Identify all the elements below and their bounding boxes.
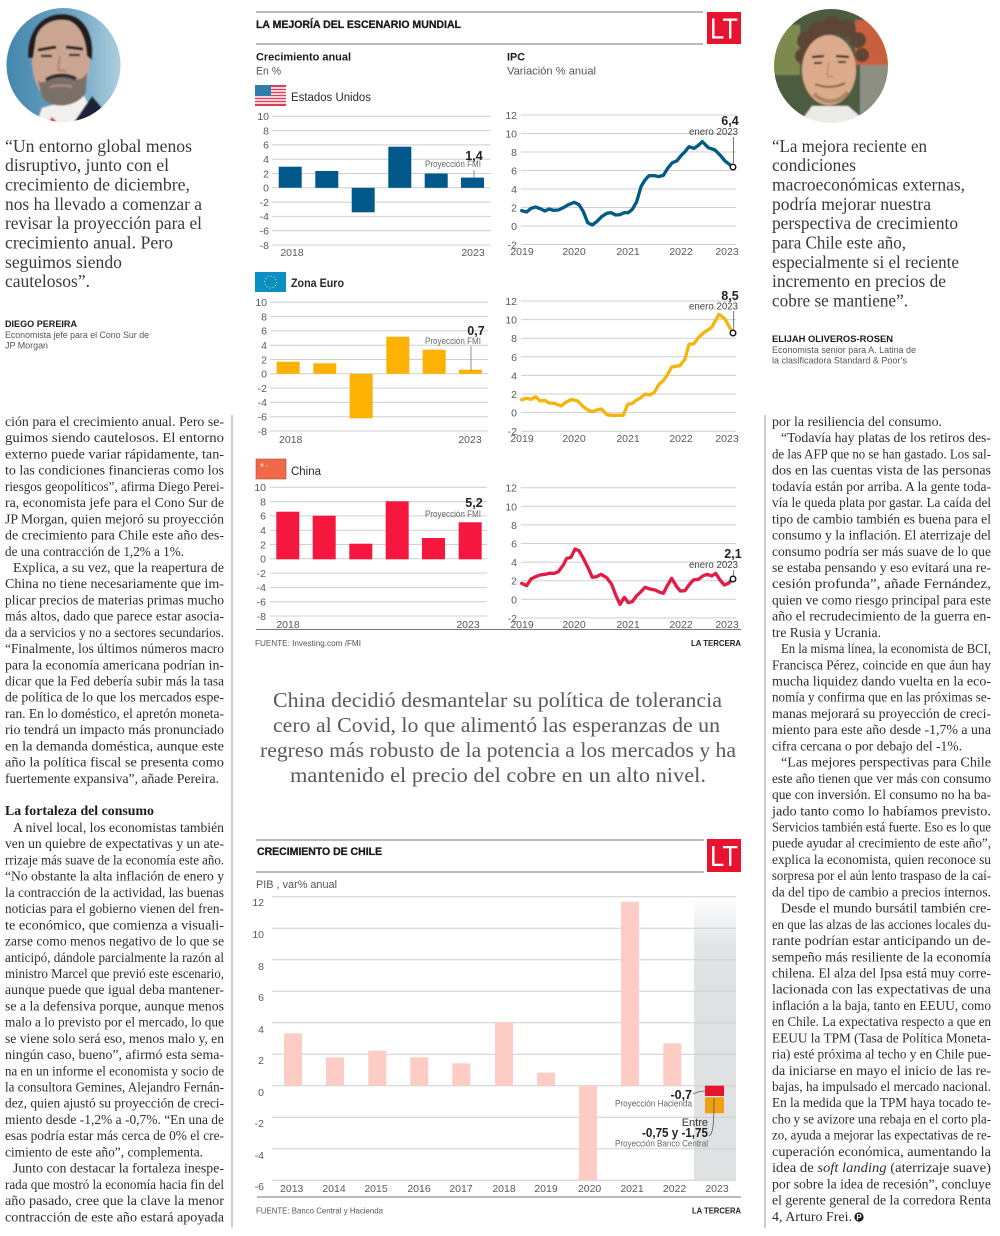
article text: right column: cesión profunda”, añade Fernández, <box>772 576 991 591</box>
article text: left column: en la demanda doméstica, aunque este <box>5 738 224 753</box>
line chart: IPC Zona Euro: -2 <box>508 426 517 438</box>
bar chart: crecimiento China: -8 <box>257 611 266 623</box>
bar chart: PIB Chile: 2019 <box>534 1183 558 1195</box>
article text: left column: ningún caso, bueno”, afirmó esta sema- <box>5 1047 224 1062</box>
article text: left column: fuertemente expansiva”, añade Pereira. <box>5 771 219 786</box>
article text: left column: dicar que la Fed debería subir más la tasa <box>5 674 224 688</box>
article text: left column: noticias para el gobierno vienen del fren- <box>5 901 224 916</box>
article text: right column: bajas, ha impulsado el mercado nacional. <box>772 1079 991 1094</box>
bar chart: crecimiento Estados Unidos: 0 <box>263 183 269 195</box>
article text: left column: se viene solo será eso, menos malo y, en <box>5 1031 224 1046</box>
line chart: IPC Estados Unidos: 10 <box>505 128 517 140</box>
line chart: IPC China: 6 <box>511 538 517 550</box>
quote: Elijah Oliveros-Rosen: “La mejora reciente en <box>772 136 927 156</box>
line chart: IPC Zona Euro: 0 <box>511 408 517 420</box>
bar chart: crecimiento Estados Unidos <box>257 111 491 259</box>
line chart: IPC Zona Euro: 2023 <box>715 433 739 445</box>
heading: la mejoría: LA MEJORÍA DEL ESCENARIO MUNDIAL <box>256 18 461 31</box>
bar chart: crecimiento China: 2023 <box>456 619 480 631</box>
article text: right column: este año tienen que ver más con consumo <box>772 771 991 786</box>
article text: left column: A nivel local, los economistas también <box>13 820 224 835</box>
article text: right column: zo, ayuda a mejorar las expectativas de re- <box>772 1128 991 1143</box>
article text: left column: año la política fiscal se presenta como <box>5 755 224 770</box>
bar chart: crecimiento China: 2 <box>260 539 266 551</box>
bar chart: PIB Chile: 0 <box>258 1087 264 1099</box>
article text: right column: rante podrían estar anticipando un de- <box>772 933 991 948</box>
line chart: IPC China: 2023 <box>715 619 739 631</box>
line chart: IPC Zona Euro: 2021 <box>616 433 640 445</box>
bar chart: PIB Chile: 2023 <box>705 1183 729 1195</box>
bar chart: crecimiento Estados Unidos: -4 <box>260 211 269 223</box>
panel: crecimiento de Chile <box>252 839 741 1216</box>
article text: right column: da iniciarse en mayo el inicio de las re- <box>772 1063 991 1078</box>
quote: Diego Pereira: nos ha llevado a comenzar a <box>5 194 202 214</box>
line chart: IPC China: -2 <box>508 613 517 625</box>
bar chart: PIB Chile: 2021 <box>620 1183 644 1195</box>
icon: end mark <box>854 1212 864 1222</box>
bar chart: PIB Chile: 2 <box>258 1055 264 1067</box>
bar chart: crecimiento China: -6 <box>257 596 266 608</box>
bar chart: crecimiento Estados Unidos: -8 <box>260 240 269 252</box>
panel: la mejoría del escenario mundial <box>254 12 742 648</box>
quote: Diego Pereira: cautelosos”. <box>5 271 90 291</box>
article text: right column: 4, Arturo Frei. <box>772 1209 852 1224</box>
bar chart: PIB Chile: 8 <box>258 961 264 973</box>
article text: right column: dos en las cuentas vista de las personas <box>772 463 991 478</box>
bar chart: crecimiento China: 8 <box>260 496 266 508</box>
line chart: IPC Zona Euro: 4 <box>511 370 517 382</box>
article text: right column: miento para este año desde -1,7% a una <box>772 722 991 737</box>
bar chart: PIB Chile: 2015 <box>364 1183 388 1195</box>
bar chart: crecimiento Zona Euro: 2023 <box>458 434 482 446</box>
annotation: Banco Central <box>615 1117 708 1148</box>
bar chart: crecimiento Estados Unidos: 2 <box>263 168 269 180</box>
article text: left column: te económico, que comienza a visuali- <box>5 917 224 932</box>
article text: right column: de las AFP que no se han gastado. Los sal- <box>772 446 991 461</box>
line chart: IPC China: 2,1 <box>724 547 742 561</box>
line chart: IPC China: 12 <box>505 483 517 495</box>
bar chart: crecimiento Estados Unidos: -2 <box>260 197 269 209</box>
byline: Elijah Oliveros-Rosen: Economista senior para A. Latina de <box>772 345 916 355</box>
article text: left column: para la economía americana podrían in- <box>5 657 224 672</box>
label: Estados Unidos: Estados Unidos <box>291 92 371 104</box>
article text: right column: nomía y confirma que en las próximas se- <box>772 690 991 705</box>
bar chart: crecimiento Zona Euro: 2018 <box>279 434 303 446</box>
byline: Diego Pereira: JP Morgan <box>5 340 48 350</box>
annotation: Hacienda: Proyección Hacienda <box>615 1098 692 1108</box>
article text: left column: cimiento de este año”, complementa. <box>5 1144 203 1159</box>
line chart: IPC Estados Unidos: 2020 <box>562 246 586 258</box>
article text: left column <box>5 414 224 1224</box>
article text: left column: ran. En lo doméstico, el apretón moneta- <box>5 706 224 721</box>
article text: right column: En la medida que la TPM haya tocado te- <box>772 1095 991 1110</box>
credit: La Tercera: LA TERCERA <box>692 1206 741 1216</box>
line chart: IPC China: 2 <box>511 576 517 588</box>
article text: right column: Desde el mundo bursátil también cre- <box>781 901 991 916</box>
bar chart: crecimiento Zona Euro: -8 <box>258 426 267 438</box>
line chart: IPC China: 4 <box>511 557 517 569</box>
article text: left column: la contracción de la actividad, las buenas <box>5 885 224 900</box>
byline: Diego Pereira: Economista jefe para el Cono Sur de <box>5 330 149 340</box>
line chart: IPC Zona Euro: 6 <box>511 352 517 364</box>
subheading: crecimiento anual: Crecimiento anual <box>256 52 351 64</box>
byline: Diego Pereira: DIEGO PEREIRA <box>5 319 77 330</box>
line chart: IPC Estados Unidos: enero 2023 <box>689 127 738 138</box>
article text: right column: quien ve como riesgo principal para este <box>772 592 991 607</box>
line chart: IPC China <box>505 483 742 631</box>
article text: right column: tipo de cambio también es buena para el <box>772 511 991 526</box>
article text: right column: sorpresa por el aún lento traspaso de la caí- <box>772 868 991 883</box>
article text: right column: que con inversión. El consumo no ha ba- <box>772 787 991 802</box>
bar chart: crecimiento Estados Unidos: 6 <box>263 140 269 152</box>
callout: pull quote: China decidió desmantelar su política de tolerancia <box>273 688 723 712</box>
bar chart: crecimiento Zona Euro: -2 <box>258 383 267 395</box>
line chart: IPC Estados Unidos: 4 <box>511 184 517 196</box>
bar chart: PIB Chile: 2016 <box>407 1183 431 1195</box>
icon: flag Zona Euro <box>255 272 286 292</box>
quote: Elijah Oliveros-Rosen: cobre se mantiene”. <box>772 290 908 310</box>
article text: left column: externo puede variar rápidamente, tan- <box>5 446 224 461</box>
bar chart: PIB Chile: 2017 <box>449 1183 473 1195</box>
article text: right column: inflación a la baja, tanto en EEUU, como <box>772 998 991 1013</box>
article text: left column: rada que mostró la economía hacia fin del <box>5 1177 224 1192</box>
label: China: China <box>291 466 322 478</box>
quote: Diego Pereira: seguimos siendo <box>5 252 122 272</box>
quote: Elijah Oliveros-Rosen <box>772 136 965 310</box>
quote: Diego Pereira: disruptivo, junto con el <box>5 155 169 175</box>
bar chart: crecimiento China: -4 <box>257 582 266 594</box>
line chart: IPC Estados Unidos: 2023 <box>715 246 739 258</box>
bar chart: PIB Chile: 2022 <box>663 1183 686 1195</box>
credit: La Tercera: LA TERCERA <box>691 638 741 648</box>
line chart: IPC Zona Euro: 12 <box>505 296 517 308</box>
quote: Elijah Oliveros-Rosen: macroeconómicas externas, <box>772 174 965 194</box>
article text: right column: “Todavía hay platas de los retiros des- <box>781 430 991 445</box>
icon: flag China <box>256 459 286 479</box>
line chart: IPC China: 2019 <box>510 619 534 631</box>
bar chart: crecimiento Zona Euro: -6 <box>258 412 267 424</box>
bar chart: PIB Chile: 2020 <box>578 1183 601 1195</box>
quote: Diego Pereira: crecimiento de diciembre, <box>5 174 190 194</box>
bar chart: crecimiento China: -2 <box>257 568 266 580</box>
bar chart: PIB Chile: 10 <box>252 929 264 941</box>
article text: left column: ven un quiebre de expectativas y un ate- <box>5 836 224 851</box>
line chart: IPC Estados Unidos <box>505 110 739 258</box>
line chart: IPC Estados Unidos: 2019 <box>510 246 534 258</box>
bar chart: crecimiento Zona Euro: 2 <box>261 354 267 366</box>
bar chart: crecimiento China: 6 <box>260 511 266 523</box>
quote: Elijah Oliveros-Rosen: podría mejorar nuestra <box>772 194 931 214</box>
article text: left column: la consultora Gemines, Alejandro Fernán- <box>5 1080 224 1094</box>
annotation: Banco Central: Entre <box>682 1117 708 1129</box>
article text: right column: jado tanto como lo habíamos previsto. <box>771 803 991 818</box>
article text: left column: China no tiene necesariamente que im- <box>5 576 224 591</box>
article text: right column: lacionada con las expectativas de una <box>772 982 991 997</box>
subtitle: PIB: PIB , var% anual <box>256 879 337 891</box>
article text: right column: por la resiliencia del consumo. <box>772 414 942 429</box>
line chart: IPC Estados Unidos: -2 <box>508 240 517 252</box>
article text: left column: “Finalmente, los últimos números macro <box>5 641 224 656</box>
quote: Elijah Oliveros-Rosen: para Chile este año, <box>772 232 906 252</box>
bar chart: PIB Chile: -6 <box>255 1181 264 1193</box>
article text: right column: consumo y la inflación. El aterrizaje del <box>772 528 991 542</box>
article text: left column: Explica, a su vez, que la reapertura de <box>13 560 224 575</box>
callout: pull quote <box>260 688 737 787</box>
article text: right column: “Las mejores perspectivas para Chile <box>781 755 991 770</box>
article text: right column: por sobre la idea de recesión”, concluye <box>772 1176 991 1191</box>
subheading: crecimiento anual <box>256 52 351 78</box>
bar chart: crecimiento China: 10 <box>254 482 266 494</box>
line chart: IPC China: 0 <box>511 594 517 606</box>
source: mejoría: FUENTE: Investing.com /FMI <box>255 638 361 648</box>
line chart: IPC Zona Euro: 2019 <box>510 433 534 445</box>
article text: right column: vía le queda plata por gastar. La caída del <box>772 495 991 510</box>
icon: LT logo: LT <box>710 14 738 46</box>
article text: right column: en Chile. La expectativa respecto a que en <box>772 1014 991 1029</box>
bar chart: crecimiento China <box>254 482 487 631</box>
bar chart: PIB Chile: 6 <box>258 992 264 1004</box>
article text: left column: plicar precios de materias primas mucho <box>5 592 224 607</box>
article text: right column: Francisca Pérez, coincide en que áun hay <box>772 657 991 672</box>
line chart: IPC China: enero 2023 <box>689 560 738 571</box>
line chart: IPC Estados Unidos: 12 <box>505 110 517 122</box>
article text: left column: más altos, dado que parece estar asocia- <box>5 609 224 624</box>
article text: right column: En la misma línea, la economista de BCI, <box>781 641 991 656</box>
article text: right column: cuperación económica, aumentando la <box>772 1144 991 1159</box>
photo: Elijah Oliveros-Rosen <box>774 9 888 123</box>
line chart: IPC Estados Unidos: 6,4 <box>721 114 739 128</box>
bar chart: crecimiento Estados Unidos: 1,4 <box>465 149 483 163</box>
article text: right column: cifra cercana o por debajo del -1%. <box>772 738 962 753</box>
line chart: IPC Zona Euro: 10 <box>505 315 517 327</box>
annotation: Banco Central: -0,75 y -1,75 <box>642 1126 708 1140</box>
byline: Elijah Oliveros-Rosen: ELIJAH OLIVEROS-ROSEN <box>772 334 893 345</box>
article text: left column: ministro Marcel que previó este escenario, <box>5 966 224 981</box>
bar chart: crecimiento Estados Unidos: 4 <box>263 154 269 166</box>
article text: left column: da a servicios y no a sectores secundarios. <box>5 625 224 640</box>
subheading: IPC <box>507 52 596 78</box>
bar chart: PIB Chile: 2018 <box>492 1183 516 1195</box>
article text: left column: ción para el crecimiento anual. Pero se- <box>5 414 224 429</box>
article text: left column: esas podría estar más cerca de 0% el cre- <box>5 1128 224 1143</box>
article text: left column: rio tendrá un impacto más pronunciado <box>5 722 224 737</box>
article text: left column: malo a lo previsto por el mercado, lo que <box>5 1015 224 1030</box>
icon: LT logo: LT <box>710 841 738 873</box>
article text: left column: to las condiciones financieras como los <box>5 463 224 478</box>
article text: left column: de crecimiento para Chile este año des- <box>5 528 224 542</box>
article text: left column: anticipó, dándole parcialmente la razón al <box>5 950 224 965</box>
article text: right column: explica la economista, quien reconoce su <box>772 852 991 867</box>
line chart: IPC China: 2020 <box>562 619 586 631</box>
bar chart: crecimiento Zona Euro: 0 <box>261 369 267 381</box>
quote: Elijah Oliveros-Rosen: especialmente si el reciente <box>772 252 959 272</box>
line chart: IPC Estados Unidos: 8 <box>511 147 517 159</box>
line chart: IPC Estados Unidos: 2 <box>511 202 517 214</box>
bar chart: crecimiento China: Proyección FMI <box>425 509 481 519</box>
bar chart: crecimiento China: 2018 <box>276 619 300 631</box>
quote: Elijah Oliveros-Rosen: condiciones <box>772 155 856 175</box>
article text: left column: Junto con destacar la fortaleza inespe- <box>13 1161 224 1176</box>
article text: left column: de política de lo que los mercados espe- <box>5 690 224 705</box>
annotation: Hacienda: -0,7 <box>670 1088 692 1102</box>
article text: left column: contracción de este año estará apoyada <box>5 1209 224 1224</box>
article text: right column: se estaba pensando y eso evitará una re- <box>772 560 991 575</box>
photo: Diego Pereira <box>6 8 120 122</box>
article text: right column: cho y se avizore una rebaja en el corto pla- <box>772 1112 991 1126</box>
line chart: IPC China: 2021 <box>616 619 640 631</box>
quote: Diego Pereira: revisar la proyección para el <box>5 213 202 233</box>
article text: left column: se a la defensiva porque, aunque menos <box>5 998 224 1013</box>
bar chart: crecimiento Estados Unidos: Proyección FMI <box>425 159 481 169</box>
line chart: IPC Zona Euro: 2020 <box>562 433 586 445</box>
icon: end mark: P <box>856 1213 862 1222</box>
bar chart: crecimiento Estados Unidos: -6 <box>260 226 269 238</box>
quote: Elijah Oliveros-Rosen: perspectiva de crecimiento <box>772 213 958 233</box>
article text: left column: La fortaleza del consumo <box>5 803 154 818</box>
quote: Diego Pereira: crecimiento anual. Pero <box>5 232 173 252</box>
bar chart: crecimiento Estados Unidos: 2018 <box>280 247 304 259</box>
article text: left column: rrizaje más suave de la economía este año. <box>5 852 224 867</box>
bar chart: crecimiento Estados Unidos: 2023 <box>461 247 485 259</box>
subheading: IPC: Variación % anual <box>507 66 596 78</box>
bar: proyección Banco Central <box>705 1097 724 1113</box>
bar chart: crecimiento Zona Euro: Proyección FMI <box>425 336 481 346</box>
callout: pull quote: mantenido el precio del cobre en un alto nivel. <box>290 763 706 787</box>
quote: Diego Pereira <box>5 136 202 291</box>
icon: flag Estados Unidos <box>255 85 286 106</box>
article text: left column: de una contracción de 1,2% a 1%. <box>5 544 184 559</box>
subheading: crecimiento anual: En % <box>256 66 281 78</box>
bar chart: crecimiento China: 5,2 <box>465 496 483 510</box>
article text: right column: el gerente general de la corredora Renta <box>772 1193 991 1208</box>
article text: right column: idea de soft landing (aterrizaje suave) <box>772 1160 991 1176</box>
bar chart: crecimiento Zona Euro: 10 <box>255 297 267 309</box>
annotation: Hacienda <box>615 1088 692 1108</box>
bar chart: crecimiento Estados Unidos: 8 <box>263 125 269 137</box>
article text: right column: manas mejorará su proyección de creci- <box>772 706 991 721</box>
article text: left column: zarse como menos negativo de lo que se <box>5 934 224 948</box>
line chart: IPC Zona Euro: 8 <box>511 333 517 345</box>
bar chart: crecimiento Zona Euro: 4 <box>261 340 267 352</box>
line chart: IPC Zona Euro: 2022 <box>669 433 693 445</box>
quote: Diego Pereira: “Un entorno global menos <box>5 136 192 156</box>
bar chart: crecimiento Estados Unidos: 10 <box>257 111 269 123</box>
article text: right column: año el recrudecimiento de la guerra en- <box>772 609 991 624</box>
heading: crecimiento de Chile: CRECIMIENTO DE CHILE <box>257 846 382 858</box>
article text: left column: año pasado, cree que la clave la menor <box>5 1193 224 1208</box>
article text: right column: puede ayudar al crecimiento de este año”, <box>772 836 991 851</box>
article text: right column: EEUU la TPM (Tasa de Política Moneta- <box>772 1030 991 1046</box>
article text: right column: todavía están por arriba. A la gente toda- <box>772 479 991 494</box>
article text: left column: “No obstante la alta inflación de enero y <box>5 869 224 884</box>
callout: pull quote: regreso más robusto de la potencia a los mercados y ha <box>260 738 737 762</box>
line chart: IPC Zona Euro: 8,5 <box>721 289 739 303</box>
article text: left column: na en un informe el economista y socio de <box>5 1063 224 1078</box>
byline: Elijah Oliveros-Rosen: la clasificadora Standard & Poor’s <box>772 356 907 366</box>
line chart: IPC Zona Euro: 2 <box>511 389 517 401</box>
bar chart: PIB Chile: -4 <box>255 1150 264 1162</box>
bar chart: crecimiento Zona Euro: 6 <box>261 326 267 338</box>
bar chart: PIB Chile: -2 <box>255 1118 264 1130</box>
bar chart: PIB Chile <box>252 897 736 1195</box>
bar chart: crecimiento China: 4 <box>260 525 266 537</box>
article text: right column: consumo podría ser más suave de lo que <box>772 544 991 559</box>
quote: Elijah Oliveros-Rosen: incremento en precios de <box>772 271 946 291</box>
article text: left column: riesgos geopolíticos”, afirma Diego Perei- <box>5 479 224 494</box>
bar chart: PIB Chile: 2014 <box>322 1183 346 1195</box>
line chart: IPC China: 8 <box>511 520 517 532</box>
bar chart: crecimiento Zona Euro: 8 <box>261 311 267 323</box>
line chart: IPC Estados Unidos: 0 <box>511 221 517 233</box>
article text: right column: tre Rusia y Ucrania. <box>772 625 881 640</box>
line chart: IPC Zona Euro: enero 2023 <box>689 302 738 312</box>
callout: pull quote: cero al Covid, lo que alimentó las esperanzas de un <box>273 713 721 737</box>
line chart: IPC Zona Euro <box>505 289 739 445</box>
bar chart: PIB Chile: 12 <box>252 897 264 909</box>
article text: left column: dez, quien ajustó su proyección de creci- <box>5 1096 224 1111</box>
line chart: IPC Estados Unidos: 6 <box>511 166 517 178</box>
bar chart: PIB Chile: 2013 <box>280 1183 304 1195</box>
article text: right column <box>771 414 991 1224</box>
line chart: IPC China: 2022 <box>669 619 693 631</box>
line chart: IPC China: 10 <box>505 501 517 513</box>
source: Chile: FUENTE: Banco Central y Hacienda <box>256 1206 383 1216</box>
article text: right column: ria) esté próxima al techo y en Chile pue- <box>772 1047 991 1063</box>
bar chart: crecimiento Zona Euro <box>255 297 488 446</box>
byline: Elijah Oliveros-Rosen <box>772 334 916 366</box>
article text: right column: da del tipo de cambio a precios internos. <box>772 884 991 899</box>
line chart: IPC Estados Unidos: 2021 <box>616 246 640 258</box>
bar: proyección Hacienda <box>705 1086 724 1096</box>
annotation: Banco Central: Proyección Banco Central <box>615 1138 708 1148</box>
label: Zona Euro: Zona Euro <box>291 278 344 290</box>
article text: left column: guimos siendo cautelosos. El entorno <box>5 430 224 445</box>
bar chart: crecimiento Zona Euro: -4 <box>258 397 267 409</box>
article text: right column: mucha liquidez dando vuelta en la eco- <box>772 674 991 688</box>
article text: left column: ra, economista jefe para el Cono Sur de <box>5 495 224 510</box>
bar chart: crecimiento China: 0 <box>260 554 266 566</box>
byline: Diego Pereira <box>5 319 149 350</box>
subheading: IPC: IPC <box>507 52 525 64</box>
bar chart: PIB Chile: 4 <box>258 1024 264 1036</box>
article text: right column: chilena. El alza del Ipsa está muy corre- <box>772 966 991 980</box>
bar chart: crecimiento Zona Euro: 0,7 <box>467 324 485 338</box>
article text: left column: miento desde -1,2% a -0,7%. “En una de <box>5 1112 224 1127</box>
line chart: IPC Estados Unidos: 2022 <box>669 246 693 258</box>
article text: right column: en que las alzas de las acciones locales du- <box>772 917 991 932</box>
article text: right column: sempeño más resiliente de la economía <box>772 949 991 964</box>
article text: left column: aunque puede que igual deba mantener- <box>5 982 224 997</box>
article text: left column: JP Morgan, quien mejoró su proyección <box>5 511 224 526</box>
